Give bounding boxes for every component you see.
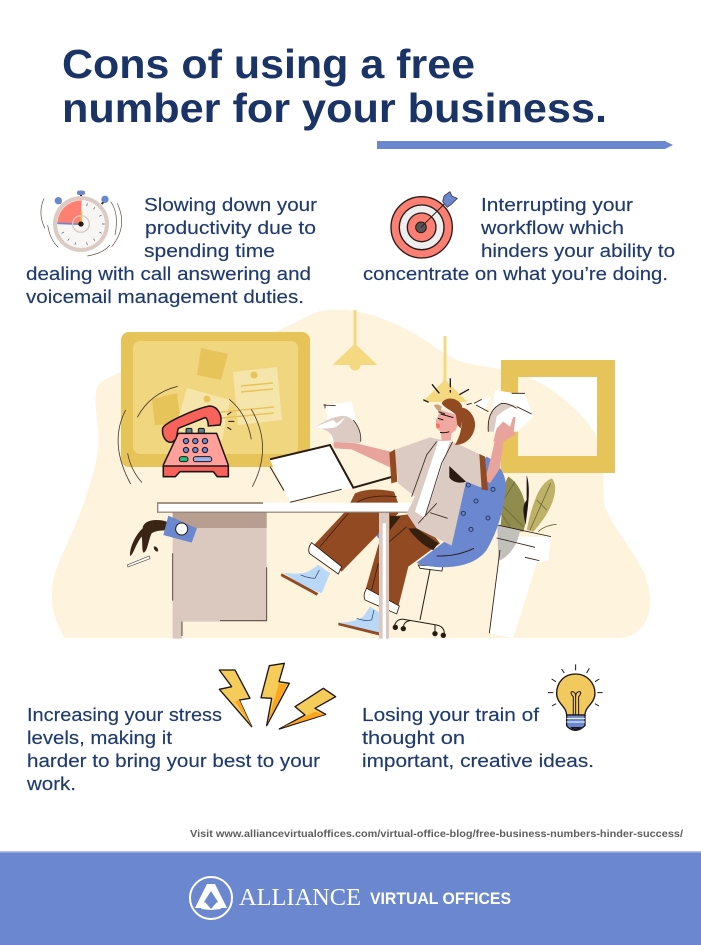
- arms: [333, 417, 515, 483]
- logo mark: [190, 877, 232, 919]
- text: train of thought: [362, 704, 594, 771]
- footer band: VIRTUAL OFFICES: [370, 889, 511, 908]
- text: slowing productivity: productivity due to: [145, 217, 316, 238]
- background blob: [52, 310, 650, 638]
- paper right: [467, 390, 533, 432]
- hand: [493, 417, 516, 442]
- paper left: [315, 402, 361, 443]
- text: stress levels: work.: [26, 773, 76, 794]
- text: interrupting workflow: hinders your ability to: [481, 240, 675, 261]
- logo wordmark: ALLIANCE: [239, 885, 361, 911]
- alert marks: [423, 378, 469, 402]
- text: interrupting workflow: concentrate on what you’re doing.: [363, 263, 668, 284]
- text: slowing productivity: dealing with call answering and: [26, 263, 311, 284]
- text: slowing productivity: [26, 194, 317, 307]
- ceiling lamp left: [332, 310, 378, 371]
- text: train of thought: thought on: [362, 727, 465, 748]
- desk top and leg: [157, 503, 415, 639]
- text: interrupting workflow: [363, 194, 675, 284]
- icon: target with arrow: [391, 192, 457, 258]
- trousers and feet: [281, 490, 440, 636]
- chair: [375, 457, 506, 638]
- worker figure: [157, 378, 557, 639]
- title: [62, 41, 607, 131]
- source link: Visit www.alliancevirtualoffices.com/virtual-office-blog/free-business-numbers-hinder-success/: [190, 828, 683, 840]
- spilled coffee and cup: [127, 516, 197, 567]
- text: slowing productivity: spending time: [144, 240, 275, 261]
- head and hair: [434, 399, 475, 445]
- plant: [489, 475, 557, 638]
- desk and drawers: [127, 512, 267, 639]
- icon: stopwatch: [41, 191, 122, 256]
- text: train of thought: Losing your train of: [362, 704, 540, 725]
- illustration: stressed worker at desk: [52, 310, 650, 639]
- laptop: [270, 445, 395, 502]
- text: train of thought: important, creative ideas.: [362, 750, 594, 771]
- jacket and shirt: [389, 437, 488, 550]
- ringing telephone: [118, 386, 263, 487]
- text: interrupting workflow: Interrupting your: [481, 194, 633, 215]
- picture frame: [501, 360, 615, 473]
- title accent bar: [377, 141, 673, 149]
- footer band: [0, 851, 701, 945]
- icon: lightning bolts: [219, 663, 336, 729]
- ceiling lamp right: [422, 336, 468, 402]
- cork board with notes: [121, 332, 310, 467]
- text: stress levels: [26, 704, 320, 794]
- text: stress levels: levels, making it: [27, 727, 172, 748]
- icon: light bulb: [548, 664, 603, 730]
- title: Cons of using a free: [62, 41, 475, 87]
- text: interrupting workflow: workflow which: [480, 217, 624, 238]
- title: number for your business.: [62, 85, 607, 131]
- text: stress levels: Increasing your stress: [27, 704, 222, 725]
- text: slowing productivity: voicemail management duties.: [26, 286, 304, 307]
- text: stress levels: harder to bring your best to your: [27, 750, 320, 771]
- text: slowing productivity: Slowing down your: [144, 194, 317, 215]
